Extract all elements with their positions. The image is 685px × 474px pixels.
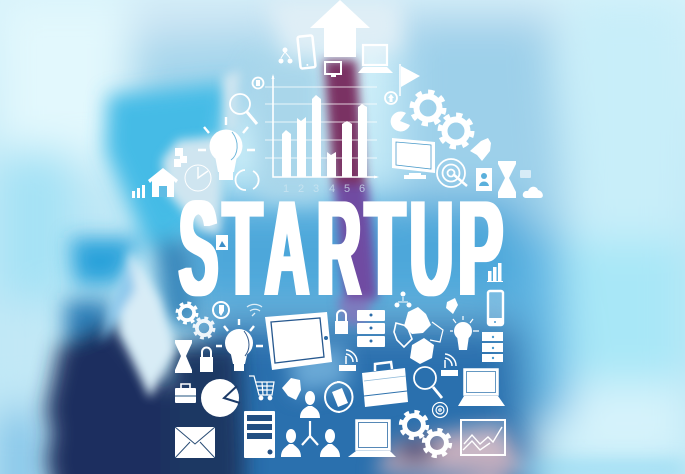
- icon: pie chart large: [201, 379, 240, 417]
- icon: puzzle piece centre: [282, 378, 301, 400]
- chart axis numbers: 6: [359, 183, 365, 195]
- icon: laptop top: [358, 45, 393, 73]
- icon: wifi small: [247, 304, 262, 316]
- icon: pie small: [391, 111, 410, 131]
- infographic: startup house of icons over blurred businessman: P: [458, 172, 503, 324]
- icon: gear lower: [440, 116, 472, 146]
- icon: magnifier lower: [414, 367, 442, 398]
- title: STARTUP: U: [410, 172, 453, 324]
- chart axis numbers: [283, 183, 365, 195]
- icon: small picture frame near title: [216, 235, 228, 250]
- icon: gear lower left one: [177, 303, 197, 323]
- icon: top arrow: [310, 0, 370, 57]
- chart axis numbers: 3: [313, 183, 319, 195]
- icon: cloud: [523, 187, 543, 198]
- icon: person network: [281, 391, 340, 457]
- icon: small monitor: [325, 62, 341, 77]
- icon: hourglass right: [498, 161, 516, 198]
- icon: padlock centre: [335, 310, 348, 334]
- icon: phone right: [488, 291, 503, 325]
- icon: gear lower left two: [194, 318, 214, 338]
- icon: refresh circle: [235, 170, 259, 190]
- icon: person network in title: [394, 292, 412, 308]
- icon: lightbulb right: [450, 316, 479, 350]
- title: STARTUP: S: [179, 172, 218, 324]
- icon: server stack centre: [357, 310, 385, 347]
- icon: house: [148, 168, 178, 197]
- icon: shopping cart: [249, 376, 274, 400]
- chart bars: [282, 95, 367, 177]
- icon: laptop bottom: [348, 420, 396, 457]
- chart axis numbers: 1: [283, 183, 289, 195]
- icon: file badge: [213, 302, 229, 318]
- bar chart with six bars: [265, 74, 379, 195]
- icon: address book: [476, 168, 492, 191]
- icon: monitor right: [392, 138, 435, 179]
- icon: flag: [400, 64, 420, 96]
- icon: server tower: [244, 411, 275, 458]
- icon: hourglass lower: [175, 340, 192, 373]
- icon: envelope: [175, 427, 215, 458]
- icon: phone top: [297, 35, 316, 69]
- title: STARTUP: T: [365, 172, 405, 324]
- chart axis numbers: 4: [329, 183, 335, 195]
- icon: puzzle piece small: [446, 298, 458, 314]
- title: STARTUP: [179, 172, 503, 324]
- icon: mini bars left: [132, 185, 145, 198]
- icon: lightbulb top: [198, 117, 255, 180]
- icon: server stack right: [482, 332, 503, 362]
- icon: mini bars right: [487, 263, 503, 282]
- icon: line chart frame: [461, 420, 505, 455]
- title: STARTUP: T: [223, 172, 262, 324]
- icon: router small centre: [339, 350, 357, 371]
- icon: briefcase large: [362, 362, 408, 407]
- icon: laptop right: [458, 369, 505, 406]
- icon: magnifier top left: [230, 94, 257, 124]
- icon: clock: [185, 165, 211, 191]
- title: STARTUP: R: [317, 172, 361, 324]
- icon: small envelope: [520, 170, 531, 178]
- icon: puzzle right: [470, 138, 491, 161]
- icon: small arrow badge right: [385, 92, 397, 104]
- icon: padlock lower: [200, 348, 213, 372]
- icon: gear bottom one: [401, 412, 427, 438]
- title: STARTUP: A: [265, 172, 309, 324]
- icon: puzzle group: [394, 307, 443, 364]
- icon: tablet: [265, 312, 332, 370]
- icon: target small: [432, 402, 448, 418]
- chart axis numbers: 5: [344, 183, 350, 195]
- icon: gear bottom two: [424, 430, 450, 456]
- icon: small arrow badge left: [252, 78, 264, 88]
- icon: network people top: [278, 48, 292, 64]
- icon: gear upper: [412, 92, 444, 124]
- icon: puzzle left: [174, 148, 187, 167]
- chart axis numbers: 2: [298, 183, 304, 195]
- icon: lightbulb lower: [216, 319, 263, 371]
- icon: router small right: [441, 354, 458, 376]
- icon: target: [437, 159, 467, 187]
- icon: refresh document: [325, 382, 353, 412]
- icon: briefcase small: [175, 384, 196, 403]
